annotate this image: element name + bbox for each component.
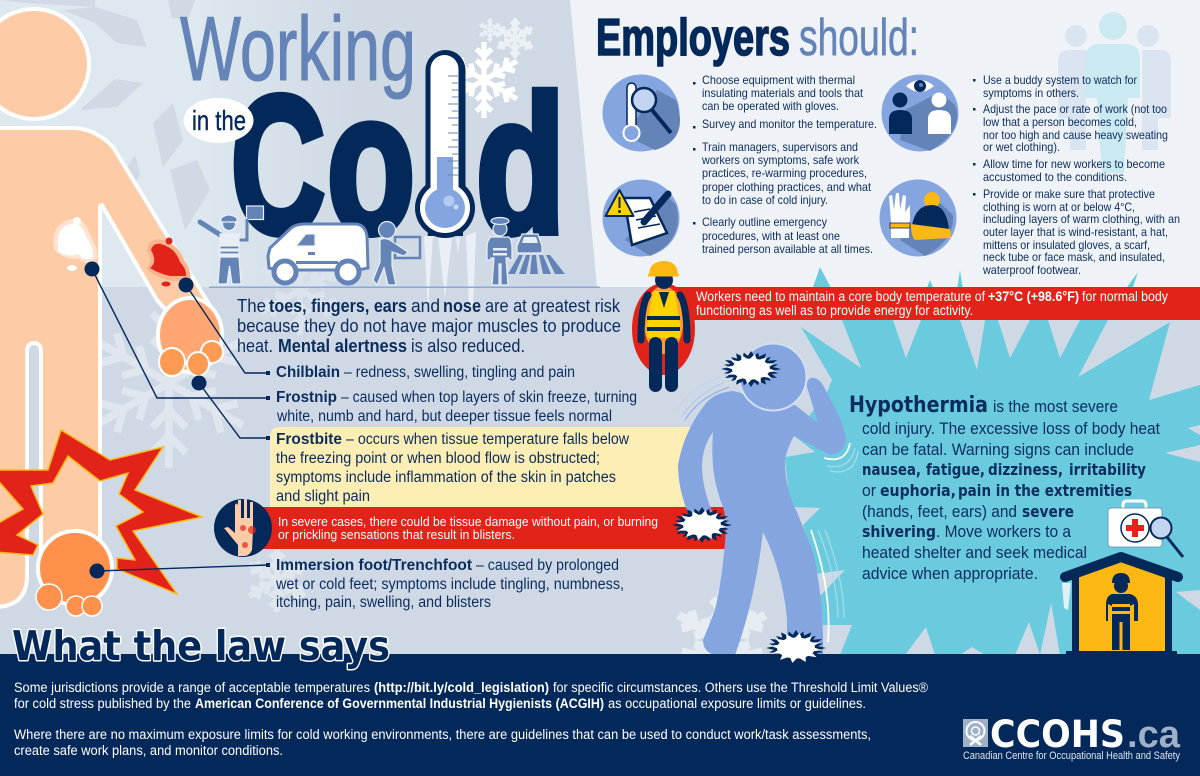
intro paragraph: Mental alertness (278, 336, 407, 356)
law text (14, 680, 928, 758)
employer actions: left list: workers on symptoms, safe work (701, 153, 860, 167)
hypothermia text: can be fatal. Warning signs can include (862, 440, 1134, 459)
hypothermia text: nausea, (862, 460, 921, 479)
title word: Cold (231, 52, 565, 275)
person head (0, 9, 89, 119)
intro paragraph: toes, fingers, ears (269, 296, 407, 316)
banner: core body temperature: +37°C (+98.6°F) (988, 289, 1079, 304)
worker in shelter (1106, 573, 1138, 650)
employer actions: left list: procedures, with at least one (702, 229, 840, 243)
icon: buddy watch (882, 74, 958, 152)
employer actions: left list: insulating materials and tools that (702, 86, 864, 100)
icon: car and crosswalk (508, 234, 565, 274)
icicles (424, 232, 476, 310)
employer actions: left list: practices, re-warming procedures, (702, 166, 867, 180)
person torso, arm and legs (0, 128, 220, 607)
pain burst: head (717, 348, 785, 390)
logo: CCOHS.ca: CCOHS (990, 713, 1125, 756)
frostbite: symptoms include inflammation of the skin in patches (276, 469, 616, 486)
hypothermia spiky backdrop (785, 267, 1200, 655)
frostnip: Frostnip (276, 389, 337, 406)
law text: Some jurisdictions provide a range of acceptable temperatures (14, 680, 370, 695)
banner: severe cases: In severe cases, there could be tissue damage without pain, or burning (278, 514, 658, 529)
hypothermia text (849, 393, 1160, 583)
frostbite: Frostbite (276, 431, 342, 448)
law text: as occupational exposure limits or guidelines. (608, 696, 866, 711)
hypothermia text: irritability (1069, 460, 1146, 479)
heading: What the law says: What the law says (12, 622, 390, 670)
intro paragraph (237, 296, 621, 356)
employer actions: right list: waterproof footwear. (982, 263, 1081, 277)
frostnip (276, 389, 637, 425)
intro paragraph: nose (443, 296, 481, 316)
banner: core body temperature: Workers need to maintain a core body temperature of (696, 289, 985, 304)
law text: American Conference of Governmental Industrial Hygienists (ACGIH) (195, 696, 604, 711)
immersion foot: Immersion foot/Trenchfoot (276, 557, 472, 574)
employer actions: right list: symptoms in others. (983, 86, 1079, 100)
hypothermia text: cold injury. The excessive loss of body heat (862, 419, 1160, 438)
employer actions: left list: Train managers, supervisors and (702, 140, 858, 154)
body (678, 378, 846, 655)
immersion foot: itching, pain, swelling, and blisters (276, 594, 491, 611)
law text: (http://bit.ly/cold_legislation) (374, 680, 549, 695)
employer actions: left list: Choose equipment with thermal (702, 73, 855, 87)
bullets (693, 82, 696, 224)
logo: CCOHS.ca: .ca (1127, 714, 1181, 756)
hypothermia text: or (862, 481, 876, 500)
frostnip: – caused when top layers of skin freeze, turning (341, 389, 637, 406)
employer actions: left list: trained person available at all times. (702, 242, 873, 256)
immersion foot: – caused by prolonged (476, 557, 619, 574)
pain burst: foot (762, 627, 830, 669)
motion lines (677, 377, 858, 642)
hand with frostbite (158, 298, 223, 376)
decorative snowflakes (87, 298, 770, 690)
icon: glove and hat (880, 180, 956, 256)
banner: core body temperature: functioning as well as to provide energy for activity. (696, 303, 973, 318)
title word: Working: Working (180, 0, 416, 100)
icon: injured hand (214, 499, 272, 557)
snowflakes beside thermometer (447, 18, 534, 118)
intro paragraph: heat. (237, 336, 273, 356)
title word: Cold: C (231, 56, 325, 274)
intro paragraph: because they do not have major muscles to produce (237, 316, 621, 336)
pain burst: hand (668, 504, 736, 546)
icon: thermometer and magnifier (602, 74, 680, 152)
hypothermia text: (hands, feet, ears) and (862, 502, 1017, 521)
panel: employers background (570, 0, 1200, 287)
intro paragraph: and (411, 296, 440, 316)
red burst on leg (0, 430, 202, 594)
pale people silhouette (1058, 12, 1171, 173)
hypothermia text: shivering (862, 522, 936, 541)
employer actions: right list: or wet clothing). (983, 140, 1060, 154)
intro paragraph: The (237, 296, 266, 316)
intro paragraph: is also reduced. (411, 336, 525, 356)
employer actions: right list: neck tube or face mask, and insulated, (983, 250, 1165, 264)
immersion foot (275, 557, 624, 611)
intro paragraph: are at greatest risk (485, 296, 621, 316)
employer actions: left list: Clearly outline emergency (702, 215, 827, 229)
chilblain: Chilblain (276, 364, 340, 381)
title: Working in the Cold (180, 0, 565, 310)
employer actions: right list: Adjust the pace or rate of work (not too (983, 102, 1167, 116)
frostnip: white, numb and hard, but deeper tissue feels normal (276, 408, 612, 425)
immersion foot: wet or cold feet; symptoms include tingling, numbness, (275, 576, 624, 593)
frostbite: the freezing point or when blood flow is obstructed; (276, 450, 600, 467)
heading: Employers should: should: (799, 9, 919, 67)
law text: for cold stress published by the (14, 696, 191, 711)
employer actions: right list: Provide or make sure that protective (983, 187, 1155, 201)
hypothermia text: . Move workers to a (936, 522, 1071, 541)
workers illustration row (200, 206, 565, 285)
badge: in the (184, 98, 254, 143)
hypothermia text: pain in the extremities (958, 481, 1132, 500)
hypothermia text: euphoria, (880, 481, 956, 500)
law text: for specific circumstances. Others use the Threshold Limit Values® (553, 680, 928, 695)
chilblain red patch (146, 238, 190, 286)
frostbite (276, 431, 630, 505)
frostbite: and slight pain (276, 488, 370, 505)
icon: first aid kit and magnifier (1108, 501, 1183, 557)
law text: create safe work plans, and monitor conditions. (14, 743, 283, 758)
ground line (209, 286, 600, 288)
icon: thermometer (415, 50, 475, 238)
employer actions: right list (973, 73, 1180, 277)
footer band (0, 654, 1200, 776)
icon: flagman (200, 206, 264, 284)
employer actions: left list: to do in case of cold injury. (702, 193, 828, 207)
employer actions: right list: Allow time for new workers to become (983, 157, 1165, 171)
employer actions: left list (693, 73, 877, 256)
title word: Cold: d (476, 56, 565, 274)
icon: construction worker on red oval (632, 261, 695, 392)
heading: Employers should: Employers (596, 9, 790, 67)
cold injury list (275, 364, 637, 611)
employer actions: left list: Survey and monitor the temperature. (702, 117, 877, 131)
hypothermia text: heated shelter and seek medical (862, 543, 1087, 562)
title word: Cold: l (418, 56, 473, 274)
icon: van (268, 224, 368, 283)
figure: person with hypothermia (668, 344, 858, 655)
employer actions: right list: including layers of warm clothing, with an (983, 212, 1180, 226)
icon: warning and notepad (602, 180, 680, 256)
employer actions: right list: accustomed to the conditions. (983, 170, 1127, 184)
icon: delivery worker (373, 222, 420, 285)
employer actions: left list: can be operated with gloves. (702, 99, 839, 113)
panel: frostbite highlight (270, 427, 700, 507)
employer actions: right list: Use a buddy system to watch for (983, 73, 1137, 87)
employer actions: right list: outer layer that is wind-resistant, a hat, (983, 225, 1168, 239)
employer actions: left list: proper clothing practices, and what (702, 180, 872, 194)
badge: in the: in the (192, 105, 246, 136)
hypothermia text: fatigue, (926, 460, 985, 479)
icon: heated shelter (1062, 557, 1178, 655)
foot (36, 531, 112, 616)
hypothermia text: advice when appropriate. (862, 564, 1038, 583)
hypothermia text: is the most severe (993, 397, 1118, 416)
banner: severe cases (262, 507, 726, 549)
frostbite: – occurs when tissue temperature falls below (346, 431, 630, 448)
frostnip white patch (53, 217, 97, 271)
banner: severe cases: or prickling sensations that result in blisters. (278, 527, 515, 542)
hypothermia text: Hypothermia (849, 393, 988, 418)
logo: CCOHS.ca (963, 713, 1181, 762)
law text: Where there are no maximum exposure limits for cold working environments, there are guidelines that can be used to conduct work/task assessments, (14, 727, 871, 742)
employer actions: right list: low that a person becomes cold, (983, 115, 1137, 129)
icon: traffic officer (487, 218, 512, 285)
hypothermia text: dizziness, (988, 460, 1063, 479)
head (740, 344, 806, 410)
callout lines and markers (84, 262, 270, 578)
body figure (0, 9, 223, 616)
employer actions: right list: nor too high and cause heavy sweating (983, 128, 1168, 142)
title word: Cold: o (327, 52, 415, 275)
chilblain: – redness, swelling, tingling and pain (344, 364, 575, 381)
employer actions: right list: mittens or insulated gloves, a scarf, (983, 238, 1150, 252)
bullets (973, 79, 976, 196)
banner: core body temperature (660, 287, 1200, 320)
banner: core body temperature: for normal body (1082, 289, 1168, 304)
employer actions: right list: clothing is worn at or below 4°C, (983, 200, 1135, 214)
hypothermia text: severe (1022, 502, 1074, 521)
